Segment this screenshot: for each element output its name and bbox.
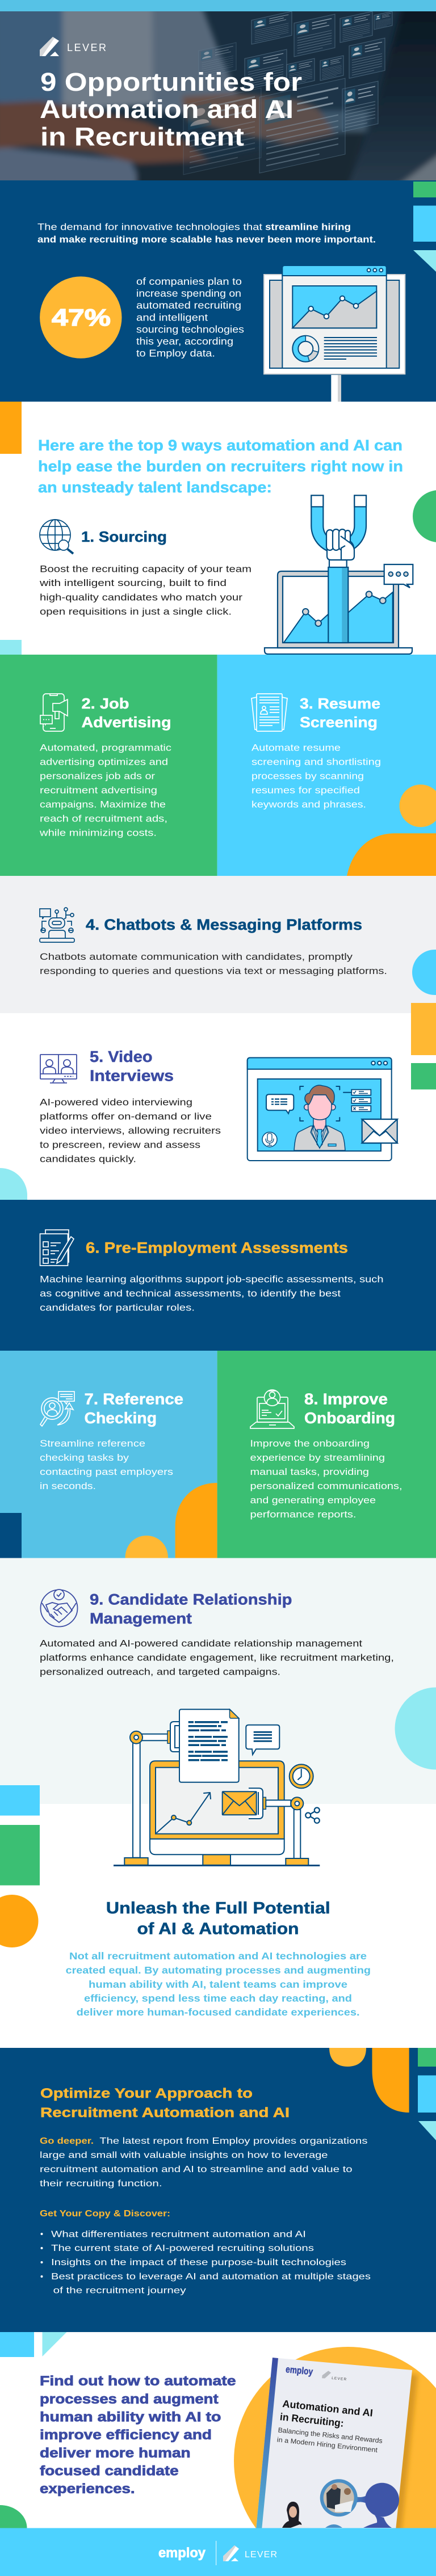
sourcing description: Boost the recruiting capacity of your team <box>40 564 251 574</box>
heading: 3. Resume Screening <box>300 695 380 731</box>
icon: resume document <box>251 694 287 731</box>
panel: resume screening <box>217 655 436 876</box>
illustration: robotic arms with monitor <box>114 1709 320 1865</box>
onboarding description: performance reports. <box>250 1509 357 1520</box>
CTA text: human ability with AI to <box>40 2410 221 2425</box>
stat description: of companies plan to <box>136 276 242 287</box>
go deeper text: Go deeper. <box>40 2136 94 2146</box>
assessments description <box>40 1274 384 1313</box>
video interviews description <box>40 1097 221 1164</box>
section heading <box>38 437 403 496</box>
heading: 5. Video Interviews: 5. Video <box>90 1048 152 1065</box>
video interviews description: platforms offer on-demand or live <box>40 1111 212 1122</box>
section heading: help ease the burden on recruiters right now in <box>38 458 403 475</box>
CTA text: processes and augment <box>40 2392 219 2407</box>
hero photo: hands on laptop with resume cards <box>0 6 436 187</box>
icon: phone megaphone <box>40 694 68 731</box>
unleash description: Not all recruitment automation and AI technologies are <box>69 1950 367 1962</box>
job advertising description: advertising optimizes and <box>40 757 168 767</box>
footer Lever logo: LEVER <box>245 2550 277 2560</box>
heading: optimize: Optimize Your Approach to <box>40 2086 253 2101</box>
CTA text: focused candidate <box>40 2463 179 2479</box>
stat description: increase spending on <box>136 288 241 299</box>
hero panel <box>0 6 436 187</box>
CTA text <box>40 2373 236 2497</box>
onboarding description: Improve the onboarding <box>250 1438 370 1449</box>
panel: pre-employment assessments <box>0 1200 436 1351</box>
title: 9 Opportunities for <box>40 68 302 96</box>
stat description <box>136 276 244 359</box>
candidate relationship description: personalized outreach, and targeted campaigns. <box>40 1667 280 1677</box>
sourcing description: high-quality candidates who match your <box>40 592 242 602</box>
reference checking description: checking tasks by <box>40 1452 129 1463</box>
resume screening description: resumes for specified <box>251 785 360 795</box>
assessments description: Machine learning algorithms support job-specific assessments, such <box>40 1274 384 1284</box>
reference checking description: Streamline reference <box>40 1438 145 1449</box>
chatbots description: Chatbots automate communication with candidates, promptly <box>40 951 353 962</box>
report cover logos: LEVER <box>332 2376 347 2381</box>
panel: intro stat <box>0 180 436 402</box>
heading: 2. Job Advertising <box>82 695 171 731</box>
bullet list: What differentiates recruitment automation and AI <box>51 2229 306 2240</box>
sourcing description: with intelligent sourcing, built to find <box>39 577 227 588</box>
heading: 7. Reference Checking <box>84 1390 183 1427</box>
onboarding description <box>250 1438 402 1520</box>
heading: 7. Reference Checking: 7. Reference <box>84 1390 183 1408</box>
heading: 2. Job Advertising: 2. Job <box>82 695 129 712</box>
panel: chatbots and messaging <box>0 876 436 1013</box>
heading: 4. Chatbots and Messaging Platforms: 4. Chatbots & Messaging Platforms <box>86 916 362 933</box>
heading: 1. Sourcing: 1. Sourcing <box>81 528 167 545</box>
icon: reference search <box>40 1392 74 1426</box>
onboarding description: experience by streamlining <box>250 1452 385 1463</box>
unleash description: efficiency, spend less time each day reacting, and <box>84 1992 352 2004</box>
panel: video interviews <box>0 1003 436 1200</box>
icon: global handshake <box>41 1590 77 1627</box>
intro text: The demand for innovative technologies that <box>37 221 262 233</box>
heading: 8. Improve Onboarding: Onboarding <box>304 1409 395 1427</box>
stat description: and intelligent <box>136 312 208 323</box>
video interviews description: to prescreen, review and assess <box>40 1139 200 1150</box>
heading: 7. Reference Checking: Checking <box>84 1409 157 1427</box>
unleash description: human ability with AI, talent teams can improve <box>89 1979 347 1990</box>
heading: 6. Pre-Employment Assessments: 6. Pre-Employment Assessments <box>86 1239 348 1256</box>
unleash description <box>66 1950 371 2018</box>
unleash description: created equal. By automating processes and augmenting <box>66 1964 371 1976</box>
top colour band <box>0 0 436 11</box>
job advertising description <box>39 742 172 838</box>
CTA text: experiences. <box>40 2481 135 2497</box>
candidate relationship description: Automated and AI-powered candidate relationship management <box>40 1638 362 1649</box>
icon: globe search <box>40 520 73 554</box>
assessments description: candidates for particular roles. <box>40 1302 195 1313</box>
icon: video call monitor <box>40 1055 77 1083</box>
footer band <box>0 2528 436 2576</box>
go deeper text: their recruiting function. <box>40 2179 162 2189</box>
panel: job advertising <box>0 655 217 876</box>
assessments description: as cognitive and technical assessments, to identify the best <box>40 1288 341 1299</box>
intro text: and make recruiting more scalable has never been more important. <box>37 234 376 245</box>
onboarding description: and generating employee <box>250 1495 376 1506</box>
panel: optimize your approach <box>0 2048 436 2332</box>
video interviews description: candidates quickly. <box>40 1154 136 1164</box>
job advertising description: campaigns. Maximize the <box>40 799 166 810</box>
resume screening description: keywords and phrases. <box>251 799 366 810</box>
heading: 8. Improve Onboarding <box>304 1390 395 1427</box>
go deeper text: The latest report from Employ provides organizations <box>99 2136 367 2146</box>
bullet list: The current state of AI-powered recruiting solutions <box>51 2244 314 2253</box>
go deeper text <box>40 2136 367 2189</box>
report cover title: Automation and AI <box>282 2398 374 2419</box>
video interviews description: AI-powered video interviewing <box>40 1097 192 1107</box>
heading: unleash <box>106 1899 330 1938</box>
illustration: dashboard on signpost <box>264 265 405 402</box>
stat description: this year, according <box>136 336 233 347</box>
candidate relationship description <box>40 1638 394 1677</box>
panel: reference checking <box>0 1351 217 1558</box>
reference checking description: contacting past employers <box>40 1466 173 1477</box>
stat description: automated recruiting <box>136 300 241 311</box>
subheading: get your copy: Get Your Copy & Discover: <box>40 2209 170 2219</box>
job advertising description: personalizes job ads or <box>40 770 155 782</box>
panel: unleash the full potential <box>66 1899 371 2018</box>
go deeper text: large and small with valuable insights on how to leverage <box>40 2151 328 2160</box>
heading: 3. Resume Screening: 3. Resume <box>300 695 380 712</box>
sourcing description: open requisitions in just a single click. <box>40 606 232 617</box>
job advertising description: while minimizing costs. <box>39 827 157 838</box>
title: Automation and AI <box>40 95 294 124</box>
title <box>40 68 302 151</box>
report cover artwork <box>282 2479 399 2528</box>
heading: 9. Candidate Relationship Management: 9. Candidate Relationship <box>90 1591 292 1608</box>
reference checking description: in seconds. <box>40 1481 96 1491</box>
job advertising description: Automated, programmatic <box>40 742 172 753</box>
stat circle: 47% <box>40 276 121 359</box>
bullet list: Insights on the impact of these purpose-built technologies <box>51 2258 346 2267</box>
section heading: Here are the top 9 ways automation and AI can <box>38 437 403 454</box>
Lever logo: LEVER <box>67 42 106 53</box>
report cover title <box>277 2400 383 2452</box>
onboarding description: personalized communications, <box>250 1481 402 1491</box>
panel: candidate relationship management <box>0 1558 436 1947</box>
unleash description: deliver more human-focused candidate experiences. <box>77 2006 360 2018</box>
resume screening description: screening and shortlisting <box>251 757 381 767</box>
heading: unleash: of AI & Automation <box>137 1920 299 1938</box>
sourcing description <box>39 564 251 617</box>
panel: improve onboarding <box>217 1351 436 1558</box>
heading: optimize: Recruitment Automation and AI <box>40 2105 290 2120</box>
job advertising description: recruitment advertising <box>40 785 157 795</box>
chatbots description: responding to queries and questions via text or messaging platforms. <box>40 966 387 976</box>
bullet list: Best practices to leverage AI and automation at multiple stages <box>51 2272 371 2282</box>
footer Lever logo <box>223 2545 277 2561</box>
footer employ logo: employ <box>158 2545 206 2561</box>
go deeper text: recruitment automation and AI to streamline and add value to <box>40 2165 353 2174</box>
resume screening description <box>251 742 381 810</box>
onboarding description: manual tasks, providing <box>250 1466 369 1477</box>
icon: laptop onboarding <box>250 1390 294 1428</box>
job advertising description: reach of recruitment ads, <box>40 813 167 824</box>
stat circle: 47%: 47% <box>52 304 111 331</box>
heading: optimize <box>40 2086 290 2120</box>
chatbots description <box>40 951 387 976</box>
video interviews description: video interviews, allowing recruiters <box>40 1125 221 1136</box>
heading: 9. Candidate Relationship Management <box>90 1591 292 1627</box>
heading: 2. Job Advertising: Advertising <box>82 714 171 731</box>
heading: 9. Candidate Relationship Management: Management <box>90 1610 192 1627</box>
resume screening description: Automate resume <box>251 742 341 753</box>
section heading: an unsteady talent landscape: <box>38 479 272 496</box>
panel: report call to action <box>0 2332 436 2528</box>
reference checking description <box>40 1438 173 1491</box>
icon: checklist and pencil <box>40 1230 74 1266</box>
report cover logos <box>286 2367 346 2380</box>
candidate relationship description: platforms enhance candidate engagement, like recruitment marketing, <box>40 1652 394 1663</box>
illustration: video interview window <box>248 1057 397 1161</box>
CTA text: improve efficiency and <box>40 2427 212 2443</box>
CTA text: deliver more human <box>40 2446 191 2461</box>
icon: chatbot <box>40 908 74 942</box>
heading: 3. Resume Screening: Screening <box>300 714 378 731</box>
bullet list: of the recruitment journey <box>53 2286 186 2295</box>
report cover on yellow circle <box>234 2347 436 2528</box>
stat description: sourcing technologies <box>136 323 244 335</box>
panel: top 9 ways and sourcing <box>0 402 436 655</box>
report cover title: in Recruiting: <box>279 2411 345 2429</box>
heading: unleash: Unleash the Full Potential <box>106 1899 330 1917</box>
bullet list <box>41 2229 371 2295</box>
report cover logos: employ <box>285 2364 313 2377</box>
report cover title: in a Modern Hiring Environment <box>276 2435 378 2454</box>
intro text <box>37 221 376 245</box>
heading: 5. Video Interviews: Interviews <box>90 1066 174 1085</box>
heading: 8. Improve Onboarding: 8. Improve <box>304 1390 388 1408</box>
title: in Recruitment <box>40 123 244 151</box>
resume screening description: processes by scanning <box>251 770 364 782</box>
intro text: streamline hiring <box>265 221 351 233</box>
report cover title: Balancing the Risks and Rewards <box>278 2426 383 2445</box>
CTA text: Find out how to automate <box>40 2373 236 2389</box>
Lever logo <box>40 37 106 56</box>
heading: 5. Video Interviews <box>90 1048 174 1085</box>
illustration: magnet over laptop chart <box>265 495 413 654</box>
stat description: to Employ data. <box>136 347 215 359</box>
